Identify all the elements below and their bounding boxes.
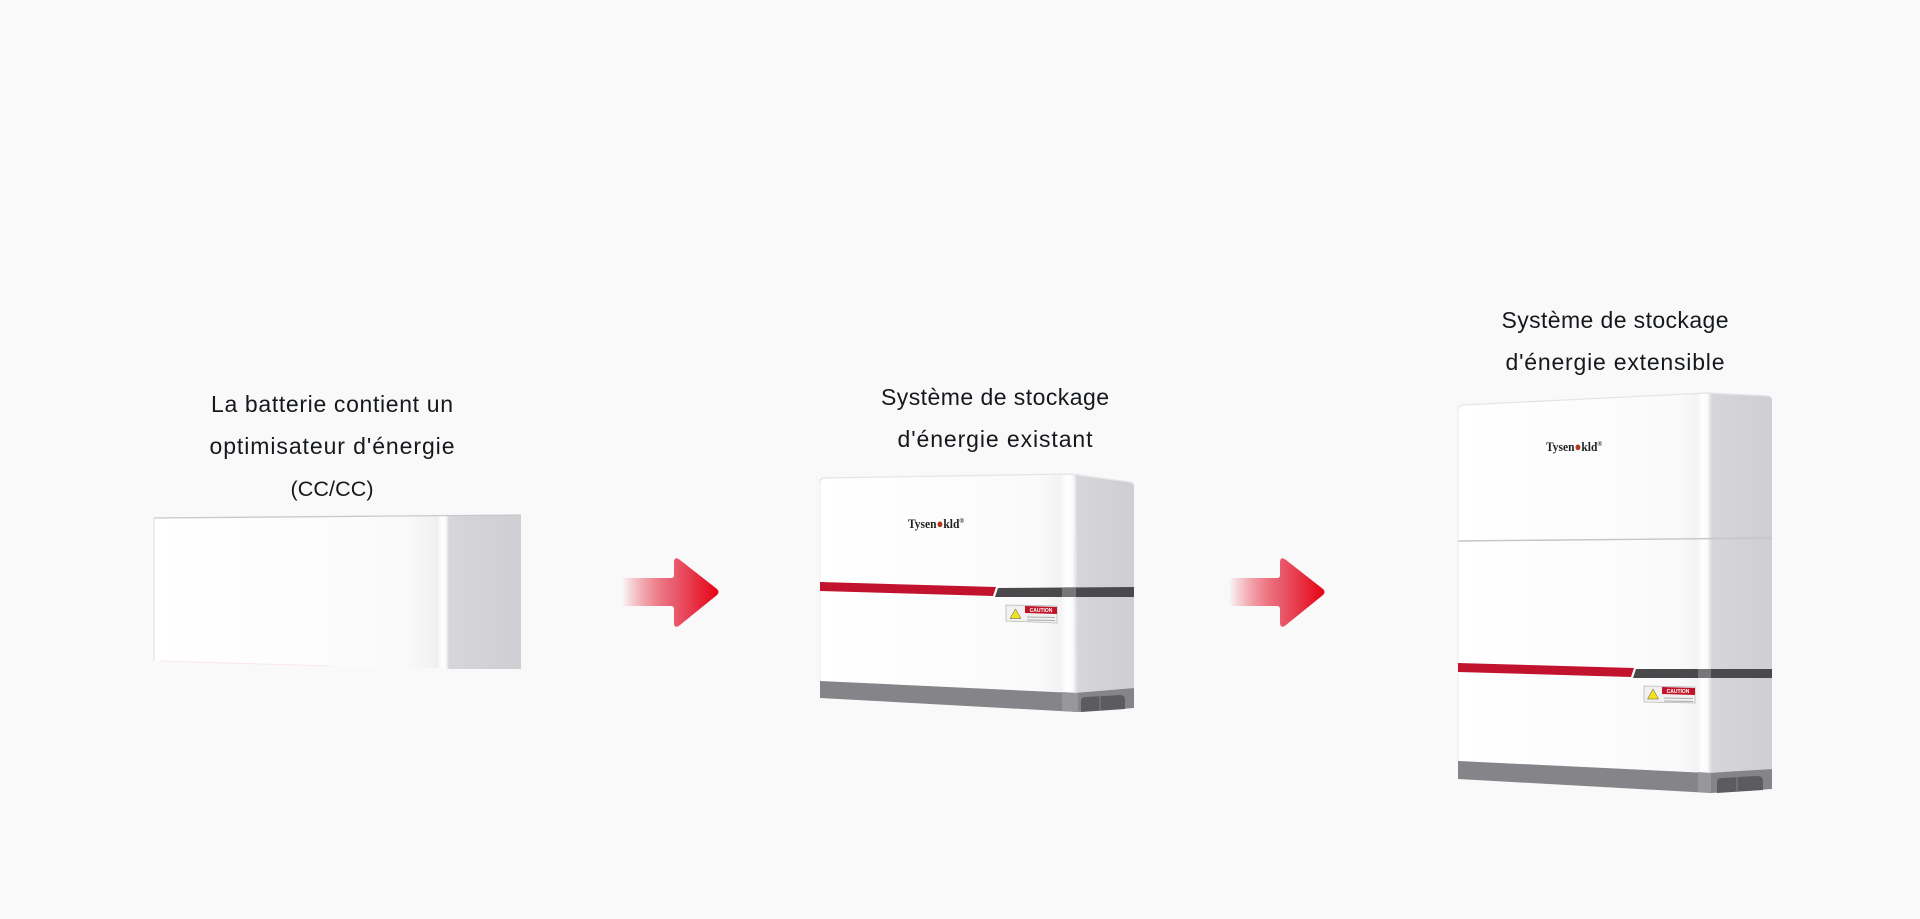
heading: existing system: d'énergie existant bbox=[898, 426, 1093, 452]
product: existing battery bbox=[820, 474, 1134, 712]
stripe: dark band bbox=[995, 587, 1134, 597]
caution label bbox=[1006, 605, 1057, 623]
heading: expandable system bbox=[1502, 307, 1728, 375]
stripe: red band bbox=[820, 582, 996, 596]
heading: existing system: Système de stockage bbox=[881, 384, 1109, 410]
stripe: red band bbox=[1458, 663, 1634, 677]
caution label: CAUTION bbox=[1667, 689, 1690, 695]
heading: optimizer module: (CC/CC) bbox=[290, 477, 374, 501]
heading: expandable system: d'énergie extensible bbox=[1506, 349, 1724, 375]
base: grey plinth bbox=[1458, 761, 1772, 793]
heading: optimizer module: La batterie contient un bbox=[211, 391, 453, 417]
base vent bbox=[1717, 776, 1763, 793]
stripe: dark band bbox=[1633, 669, 1772, 678]
logo: brand name: ® bbox=[1597, 440, 1603, 448]
caution label bbox=[1644, 686, 1695, 703]
logo: brand name: Tysen●kld bbox=[1546, 439, 1599, 454]
arrow: first step bbox=[622, 558, 718, 627]
arrow: second step bbox=[1229, 558, 1324, 627]
heading: expandable system: Système de stockage bbox=[1502, 307, 1728, 333]
panel: existing storage system bbox=[820, 384, 1134, 712]
heading: optimizer module bbox=[210, 391, 454, 501]
product: expandable battery bbox=[1458, 393, 1772, 793]
base vent bbox=[1081, 695, 1125, 712]
base: grey plinth bbox=[820, 681, 1134, 712]
logo: brand name: ® bbox=[959, 517, 965, 525]
seam between modules bbox=[1458, 538, 1772, 541]
product: optimizer box bbox=[154, 515, 521, 669]
heading: existing system bbox=[881, 384, 1109, 452]
caution label: CAUTION bbox=[1030, 608, 1053, 614]
heading: optimizer module: optimisateur d'énergie bbox=[210, 433, 454, 459]
panel: expandable storage system bbox=[1458, 307, 1772, 793]
panel: optimizer module bbox=[154, 391, 521, 669]
logo: brand name: Tysen●kld bbox=[908, 516, 961, 531]
